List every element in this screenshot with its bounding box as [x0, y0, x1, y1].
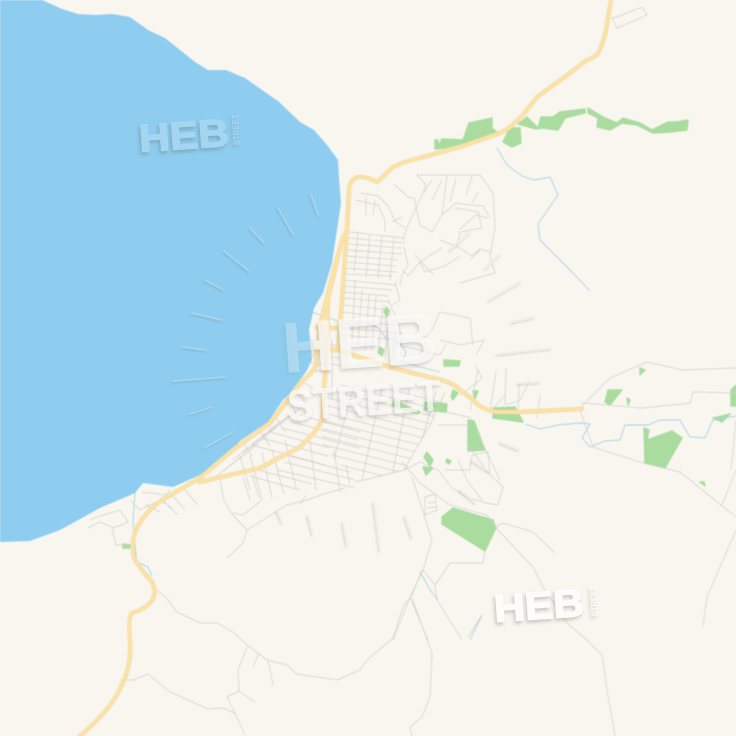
shadow ticks — [173, 194, 551, 550]
ticks over land — [277, 232, 551, 550]
river: south — [420, 572, 482, 640]
park: top strip — [435, 118, 497, 149]
street: north hill network — [356, 175, 495, 285]
street: south west town — [220, 415, 360, 558]
river: west — [133, 492, 152, 576]
watermark: bay: HEB — [138, 112, 230, 161]
river: town — [312, 312, 440, 372]
watermark: south: HEB — [493, 582, 585, 631]
park: river strip — [503, 108, 688, 147]
park: small patches — [123, 307, 736, 548]
river: north — [497, 148, 590, 291]
centre letters over land — [286, 316, 440, 424]
water: bay — [0, 0, 341, 542]
street: east town fringe — [355, 392, 615, 736]
street: central grid — [307, 280, 484, 400]
road fill — [80, 0, 611, 736]
watermark: south: STREET — [588, 586, 600, 617]
park: road strip — [493, 407, 523, 422]
watermark: bay: STREET — [230, 114, 242, 146]
park: east large — [644, 428, 682, 468]
street: coast strip — [214, 380, 318, 478]
river: east — [525, 416, 736, 447]
main roads — [80, 0, 611, 736]
road casing — [80, 0, 611, 736]
street: east town grid — [322, 385, 444, 480]
centre letters over land: HEB — [280, 298, 440, 389]
ticks over water — [173, 194, 318, 448]
street: north grid — [342, 232, 405, 345]
pond outline — [612, 7, 647, 28]
street: south rural — [120, 523, 736, 736]
street: far west — [88, 490, 198, 545]
street: east rural — [460, 362, 736, 517]
park: south block — [442, 508, 496, 551]
watermark: centre — [285, 316, 440, 424]
centre letters over water: HEB — [280, 298, 440, 389]
rivers — [133, 148, 736, 640]
parks — [123, 108, 736, 551]
park: central block — [468, 420, 485, 451]
centre letters over land: STREET — [285, 371, 443, 431]
